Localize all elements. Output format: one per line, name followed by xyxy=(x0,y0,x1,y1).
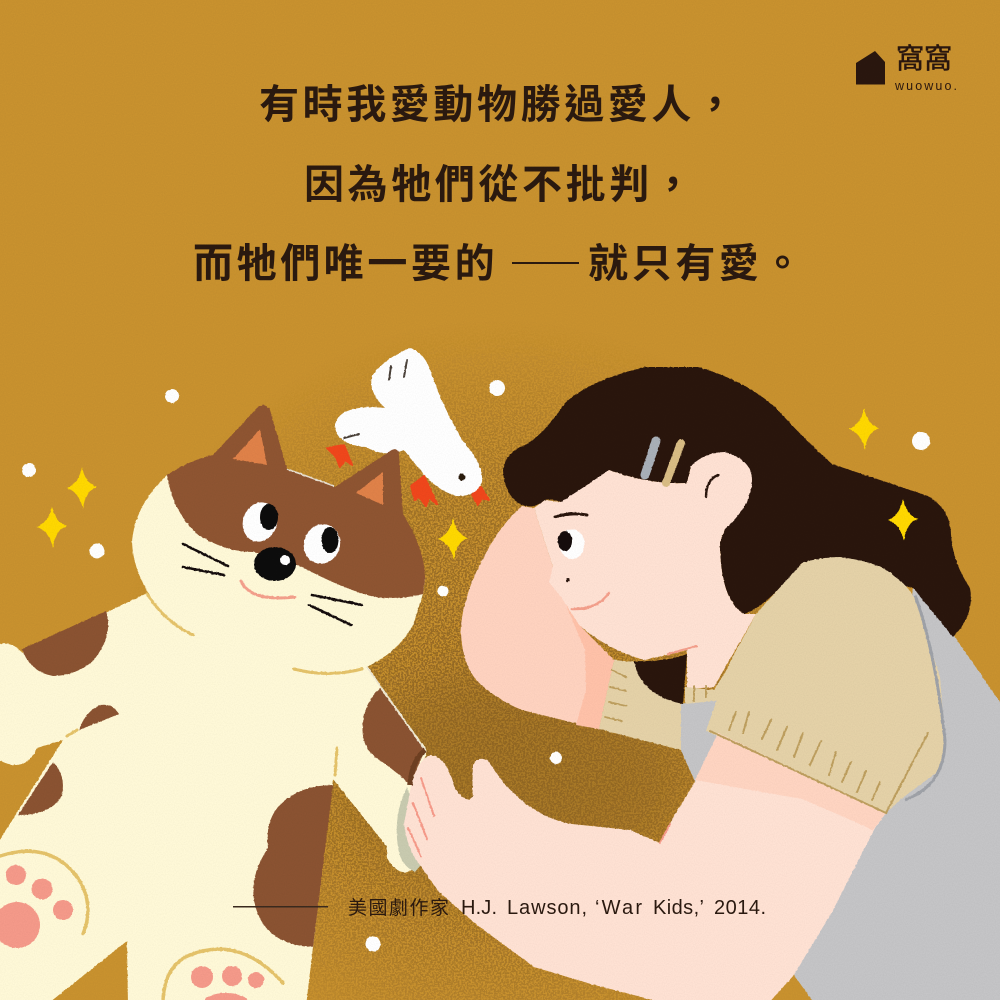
bird body xyxy=(335,348,482,496)
hair pins xyxy=(645,441,681,483)
attribution: H.J. xyxy=(461,897,497,919)
cat inner ears xyxy=(233,429,383,505)
cat body creases xyxy=(67,730,337,775)
quote heading xyxy=(193,72,806,289)
cat spots xyxy=(18,611,425,947)
dress front xyxy=(681,696,725,782)
cat xyxy=(0,405,427,1000)
sparkles xyxy=(37,408,918,560)
sleeve hem xyxy=(694,686,928,813)
ear line xyxy=(706,475,718,497)
quote line 3: 就只有愛。 xyxy=(588,231,806,289)
logo wordmark: wuowuo. xyxy=(894,79,957,93)
cat body xyxy=(0,594,427,1000)
logo characters: 窩窩 xyxy=(896,37,952,77)
attribution xyxy=(233,893,766,920)
face and neck xyxy=(534,452,756,689)
logo xyxy=(856,37,957,93)
quote line 3 xyxy=(193,231,806,289)
collar xyxy=(685,666,729,704)
far arm xyxy=(461,506,614,729)
sparkle 1 xyxy=(67,467,97,509)
arm and hand xyxy=(404,733,886,1000)
sparkle 2 xyxy=(37,506,67,548)
upper arm shade xyxy=(695,733,886,830)
sparkle 3 xyxy=(438,518,468,560)
attribution: 2014. xyxy=(714,897,766,919)
cat whiskers xyxy=(183,544,362,625)
attribution: ‘War xyxy=(595,897,642,919)
chin line xyxy=(668,646,697,654)
bird wing marks xyxy=(344,360,407,438)
hair xyxy=(503,367,971,637)
dress xyxy=(794,588,1000,1000)
sparkle 5 xyxy=(888,499,918,541)
ground shadow soft core xyxy=(350,670,690,890)
cat nose xyxy=(254,547,296,581)
cat paw left xyxy=(0,851,88,948)
attribution: Lawson, xyxy=(507,897,587,919)
cat eyes xyxy=(237,497,346,569)
cat paw right xyxy=(163,949,283,1000)
cat head highlight xyxy=(287,469,334,486)
sweater sleeve xyxy=(706,557,945,813)
nostril xyxy=(566,578,570,582)
logo house icon xyxy=(856,51,885,84)
attribution: Kids,’ xyxy=(653,897,704,919)
attribution: 美國劇作家 xyxy=(348,893,451,920)
bird xyxy=(327,348,489,506)
bird eye xyxy=(458,474,466,480)
cat head base xyxy=(132,475,425,668)
cat arm cuff xyxy=(410,750,425,785)
cat mouth xyxy=(241,581,295,598)
sweater ribs xyxy=(605,670,626,721)
finger lines xyxy=(408,778,670,856)
dress sleeve shadow xyxy=(905,595,945,800)
cat head creases xyxy=(147,594,362,674)
neck shadow hair xyxy=(634,654,687,704)
cat head patch and ears xyxy=(167,405,425,598)
bird feet xyxy=(327,445,489,506)
eyebrow xyxy=(555,514,587,517)
eye xyxy=(558,529,584,559)
paw under hand xyxy=(397,787,425,872)
far arm shade xyxy=(534,508,614,729)
sweater front xyxy=(599,660,681,750)
quote line 3: 而牠們唯一要的 xyxy=(193,231,498,289)
quote line 1: 有時我愛動物勝過愛人， xyxy=(259,72,739,130)
girl xyxy=(397,367,1000,1000)
white dots xyxy=(22,380,930,952)
quote line 2: 因為牠們從不批判， xyxy=(304,152,696,210)
smile xyxy=(572,593,609,609)
illustration xyxy=(0,348,1000,1000)
sparkle 4 xyxy=(849,408,879,450)
ground shadow xyxy=(110,320,890,1000)
cat arm highlight xyxy=(367,667,425,750)
